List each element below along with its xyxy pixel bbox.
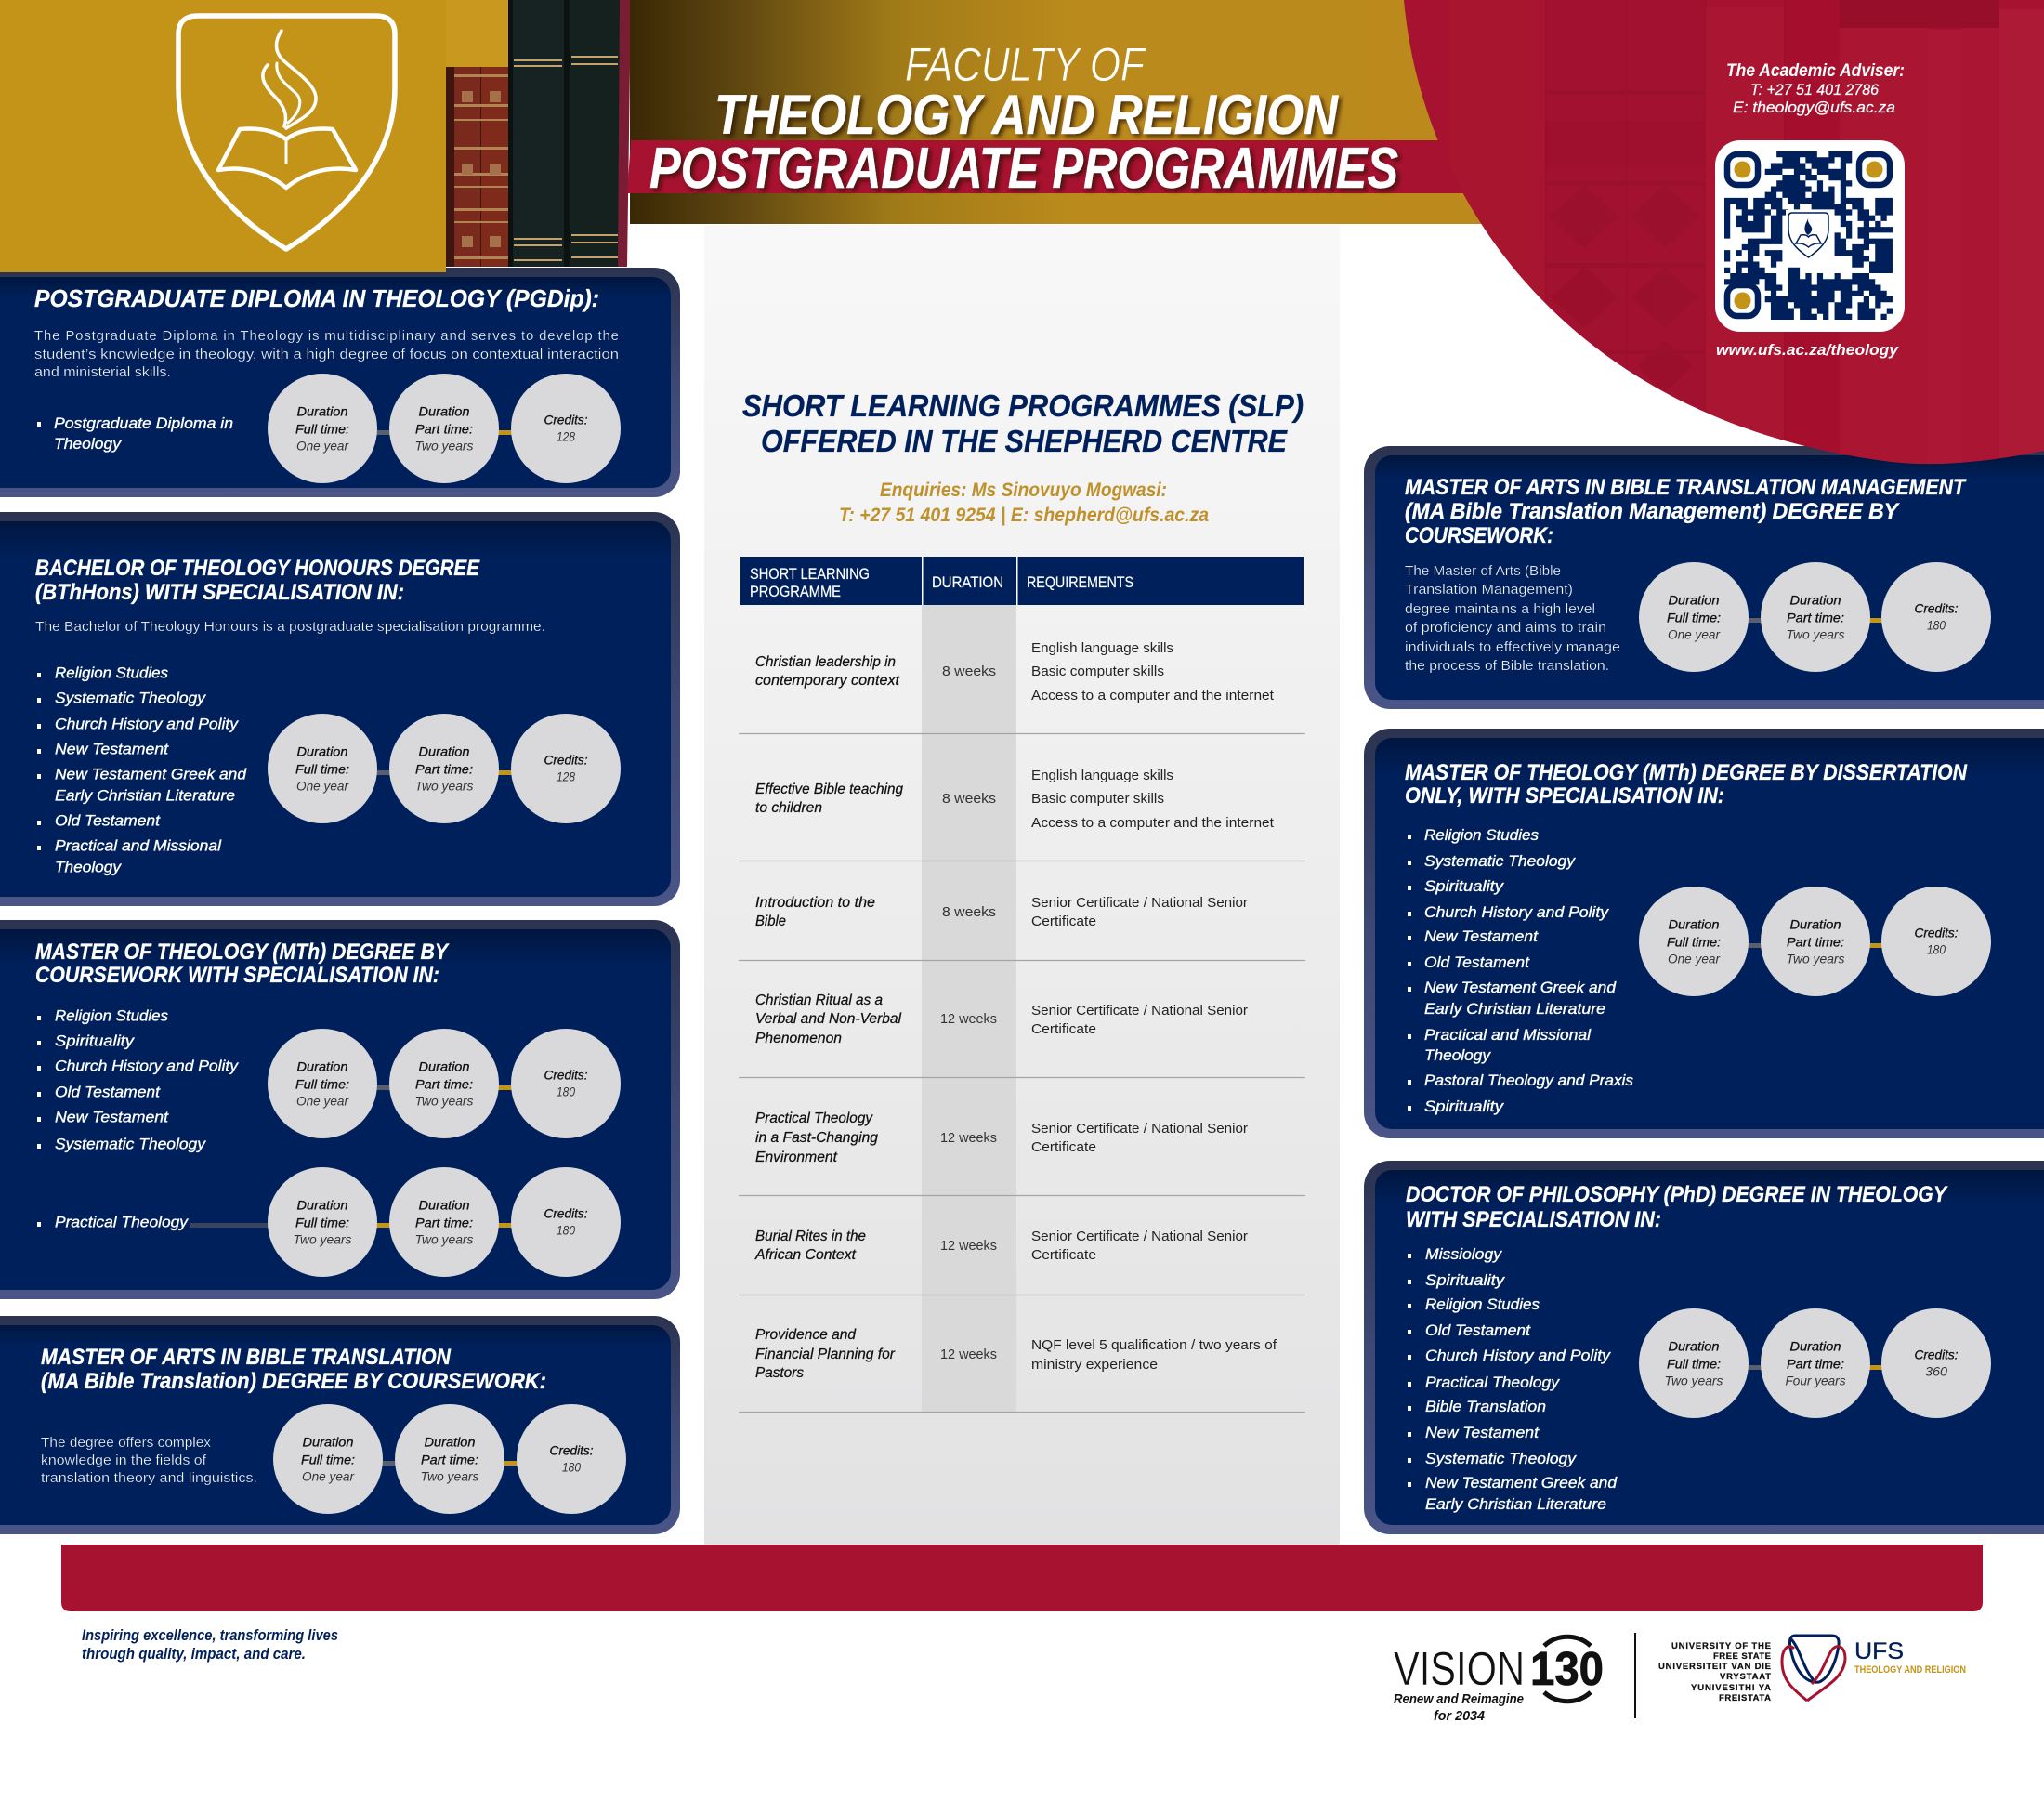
- panel: doctor of philosophy: 360: [1925, 1364, 1947, 1379]
- panel: master of arts in bible translation management: of proficiency and aims to train: [1405, 620, 1606, 636]
- table: Certificate: [1031, 914, 1096, 929]
- panel: master of arts in bible translation: One year: [302, 1468, 355, 1483]
- table: 8 weeks: [942, 791, 996, 807]
- panel: bachelor of theology honours: Duration: [418, 743, 470, 758]
- table: Senior Certificate / National Senior: [1031, 895, 1248, 911]
- panel: postgraduate diploma: The Postgraduate Diploma in Theology is multidisciplinary and serves to develop the: [34, 328, 619, 344]
- tagline: through quality, impact, and care.: [82, 1645, 306, 1663]
- table: Effective Bible teaching: [755, 782, 903, 797]
- panel: bachelor of theology honours: Part time:: [415, 762, 473, 777]
- table: English language skills: [1031, 640, 1173, 656]
- logo: UFS wordmark: UFS: [1854, 1638, 1904, 1664]
- university name: YUNIVESITHI YA: [1691, 1683, 1771, 1693]
- panel: master of theology by coursework: Church History and Polity: [55, 1058, 240, 1074]
- panel: master of theology by coursework: Part time:: [415, 1216, 473, 1230]
- panel: master of theology by coursework: [0, 920, 680, 1299]
- panel: bachelor of theology honours: 128: [557, 769, 575, 784]
- panel: doctor of philosophy: Full time:: [1667, 1357, 1721, 1372]
- table: Introduction to the: [755, 895, 875, 911]
- panel: postgraduate diploma: Two years: [414, 439, 474, 454]
- tagline: [82, 1626, 338, 1663]
- panel: doctor of philosophy: Duration: [1789, 1338, 1841, 1353]
- table: Certificate: [1031, 1139, 1096, 1155]
- table: Christian leadership in: [755, 654, 896, 670]
- table: Senior Certificate / National Senior: [1031, 1121, 1248, 1137]
- panel: master of arts in bible translation: 180: [562, 1459, 581, 1474]
- panel: postgraduate diploma: Duration: [418, 403, 470, 418]
- university name: VRYSTAAT: [1720, 1672, 1771, 1682]
- university name: UNIVERSITY OF THE: [1671, 1641, 1771, 1651]
- table: Practical Theology: [755, 1111, 873, 1126]
- panel: master of theology by dissertation: One year: [1668, 952, 1721, 966]
- panel: doctor of philosophy: Church History and Polity: [1425, 1347, 1612, 1364]
- panel: master of arts in bible translation management: The Master of Arts (Bible: [1405, 563, 1561, 579]
- panel: postgraduate diploma: student’s knowledge in theology, with a high degree of focus on contextual interaction: [34, 347, 619, 362]
- panel: doctor of philosophy: DOCTOR OF PHILOSOPHY (PhD) DEGREE IN THEOLOGY: [1406, 1182, 1948, 1207]
- panel: doctor of philosophy: Part time:: [1787, 1357, 1844, 1372]
- panel: master of arts in bible translation management: COURSEWORK:: [1405, 523, 1553, 548]
- panel: master of theology by dissertation: Part time:: [1787, 935, 1844, 950]
- panel: doctor of philosophy: Systematic Theology: [1425, 1450, 1578, 1467]
- panel: master of theology by dissertation: Early Christian Literature: [1424, 1000, 1605, 1018]
- panel: bachelor of theology honours: Two years: [414, 779, 474, 794]
- header: book spines photo: [446, 0, 631, 267]
- table: 12 weeks: [940, 1130, 997, 1146]
- panel: master of theology by coursework: COURSEWORK WITH SPECIALISATION IN:: [35, 963, 439, 988]
- panel: postgraduate diploma: Full time:: [295, 422, 349, 437]
- icon: QR code: [1715, 140, 1905, 332]
- panel: master of theology by dissertation: Credits:: [1914, 926, 1959, 940]
- panel: master of arts in bible translation management: degree maintains a high level: [1405, 601, 1595, 617]
- panel: master of arts in bible translation: (MA Bible Translation) DEGREE BY COURSEWORK:: [41, 1369, 546, 1394]
- panel: master of arts in bible translation management: Duration: [1669, 593, 1720, 608]
- panel: master of theology by dissertation: Full time:: [1667, 935, 1721, 950]
- table: in a Fast-Changing: [755, 1130, 878, 1146]
- panel: master of theology by coursework: Systematic Theology: [55, 1136, 207, 1152]
- panel: master of arts in bible translation management: Two years: [1786, 626, 1845, 641]
- panel: master of theology by dissertation: Theology: [1424, 1046, 1492, 1064]
- panel: master of theology by dissertation: Religion Studies: [1424, 826, 1539, 844]
- table: Access to a computer and the internet: [1031, 688, 1275, 703]
- panel: master of theology by coursework: 180: [557, 1223, 575, 1238]
- panel: master of arts in bible translation: knowledge in the fields of: [41, 1453, 207, 1468]
- panel: doctor of philosophy: Early Christian Literature: [1425, 1495, 1606, 1513]
- panel: master of theology by coursework: Part time:: [415, 1076, 473, 1091]
- panel: master of theology by coursework: Spirituality: [55, 1032, 136, 1050]
- panel: master of theology by coursework: Credits:: [544, 1067, 588, 1082]
- panel: doctor of philosophy: New Testament: [1425, 1424, 1540, 1441]
- contact: academic adviser: [1726, 61, 1905, 116]
- title: THEOLOGY AND RELIGION: [714, 84, 1339, 146]
- panel: master of arts in bible translation: Two years: [420, 1468, 479, 1483]
- table: Bible: [755, 914, 786, 929]
- footer: crimson bar: [61, 1545, 1983, 1611]
- table: Certificate: [1031, 1021, 1096, 1037]
- panel: short learning programmes: Enquiries: Ms Sinovuyo Mogwasi:: [880, 480, 1167, 501]
- table: Pastors: [755, 1365, 804, 1381]
- table: Certificate: [1031, 1247, 1096, 1263]
- panel: bachelor of theology honours: Credits:: [544, 753, 588, 768]
- table: Phenomenon: [755, 1031, 842, 1046]
- panel: bachelor of theology honours: BACHELOR OF THEOLOGY HONOURS DEGREE: [35, 556, 480, 581]
- panel: bachelor of theology honours: (BThHons) WITH SPECIALISATION IN:: [35, 580, 404, 605]
- tagline: Inspiring excellence, transforming lives: [82, 1626, 338, 1644]
- panel: bachelor of theology honours: New Testament Greek and: [55, 766, 247, 782]
- university name: UNIVERSITEIT VAN DIE: [1658, 1662, 1771, 1672]
- logo: Vision 130: VISION: [1394, 1642, 1525, 1695]
- panel: master of theology by coursework: 180: [557, 1084, 575, 1098]
- table: Access to a computer and the internet: [1031, 815, 1275, 831]
- panel: master of theology by dissertation: Practical and Missional: [1424, 1026, 1592, 1044]
- panel: master of theology by coursework: Duration: [297, 1197, 348, 1212]
- logo: Vision 130: 130: [1530, 1642, 1604, 1695]
- panel: master of theology by coursework: Two years: [294, 1232, 351, 1247]
- panel: master of theology by coursework: Full time:: [295, 1076, 349, 1091]
- table: 8 weeks: [942, 904, 996, 920]
- panel: bachelor of theology honours: Church History and Polity: [55, 716, 240, 732]
- panel: master of arts in bible translation management: the process of Bible translation.: [1405, 658, 1609, 674]
- panel: master of arts in bible translation management: Full time:: [1667, 610, 1721, 624]
- table: Providence and: [755, 1327, 857, 1343]
- title: FACULTY OF: [905, 38, 1146, 91]
- panel: doctor of philosophy: Duration: [1669, 1338, 1720, 1353]
- panel: master of theology by coursework: Credits:: [544, 1206, 588, 1221]
- table: 12 weeks: [940, 1238, 997, 1254]
- table: SHORT LEARNING: [750, 566, 870, 583]
- panel: master of arts in bible translation: Credits:: [550, 1442, 594, 1457]
- panel: master of arts in bible translation management: Translation Management): [1405, 582, 1573, 598]
- panel: master of arts in bible translation management: One year: [1668, 626, 1721, 641]
- table: Basic computer skills: [1031, 791, 1164, 807]
- table: Senior Certificate / National Senior: [1031, 1003, 1248, 1019]
- table: Financial Planning for: [755, 1347, 896, 1362]
- panel: bachelor of theology honours: Systematic Theology: [55, 690, 207, 706]
- table: Basic computer skills: [1031, 664, 1164, 679]
- panel: doctor of philosophy: Credits:: [1914, 1347, 1959, 1362]
- panel: master of arts in bible translation: translation theory and linguistics.: [41, 1470, 257, 1486]
- panel: bachelor of theology honours: New Testament: [55, 740, 169, 758]
- panel: master of arts in bible translation management: Part time:: [1787, 610, 1844, 624]
- table: DURATION: [932, 574, 1003, 591]
- panel: short learning programmes: T: +27 51 401 9254 | E: shepherd@ufs.ac.za: [839, 505, 1209, 526]
- panel: postgraduate diploma: POSTGRADUATE DIPLOMA IN THEOLOGY (PGDip):: [34, 284, 599, 312]
- panel: short learning programmes: [704, 225, 1340, 1545]
- panel: short learning programmes: SHORT LEARNING PROGRAMMES (SLP): [742, 388, 1304, 423]
- logo: Vision 130: [1394, 1637, 1604, 1724]
- panel: master of theology by coursework: Full time:: [295, 1216, 349, 1230]
- divider: [1634, 1633, 1636, 1718]
- website link: www.ufs.ac.za/theology: [1716, 341, 1900, 359]
- table: 12 weeks: [940, 1347, 997, 1362]
- panel: master of theology by dissertation: Systematic Theology: [1424, 852, 1577, 870]
- panel: master of theology by coursework: New Testament: [55, 1108, 169, 1126]
- panel: postgraduate diploma: Theology: [54, 435, 123, 453]
- logo: UFS wordmark: THEOLOGY AND RELIGION: [1854, 1664, 1966, 1676]
- panel: bachelor of theology honours: Full time:: [295, 762, 349, 777]
- panel: master of arts in bible translation management: MASTER OF ARTS IN BIBLE TRANSLATION MANAGEMENT: [1405, 475, 1967, 500]
- panel: master of theology by dissertation: Old Testament: [1424, 953, 1530, 971]
- panel: master of theology by dissertation: 180: [1927, 942, 1946, 957]
- table: Verbal and Non-Verbal: [755, 1011, 902, 1027]
- panel: doctor of philosophy: Four years: [1786, 1374, 1845, 1388]
- panel: bachelor of theology honours: The Bachelor of Theology Honours is a postgraduate specialisation programme.: [35, 619, 545, 635]
- panel: master of arts in bible translation management: (MA Bible Translation Management) DEGREE BY: [1405, 499, 1900, 524]
- panel: master of theology by coursework: MASTER OF THEOLOGY (MTh) DEGREE BY: [35, 940, 450, 965]
- table: REQUIREMENTS: [1027, 574, 1133, 591]
- panel: bachelor of theology honours: One year: [296, 779, 349, 794]
- contact: academic adviser: E: theology@ufs.ac.za: [1733, 99, 1895, 116]
- panel: doctor of philosophy: New Testament Greek and: [1425, 1474, 1618, 1492]
- panel: doctor of philosophy: Two years: [1665, 1374, 1723, 1388]
- table: Senior Certificate / National Senior: [1031, 1229, 1248, 1244]
- table: 12 weeks: [940, 1011, 997, 1027]
- panel: master of theology by coursework: Duration: [418, 1197, 470, 1212]
- table: contemporary context: [755, 673, 900, 689]
- header: crimson bookshelf curve: [1394, 0, 2044, 474]
- panel: master of theology by dissertation: New Testament Greek and: [1424, 979, 1617, 996]
- panel: master of theology by dissertation: Two years: [1786, 952, 1845, 966]
- panel: master of arts in bible translation: [0, 1316, 680, 1534]
- panel: doctor of philosophy: Religion Studies: [1425, 1295, 1540, 1313]
- panel: postgraduate diploma: and ministerial skills.: [34, 364, 171, 380]
- panel: master of arts in bible translation management: Credits:: [1914, 600, 1959, 615]
- panel: master of arts in bible translation: Duration: [303, 1435, 354, 1450]
- panel: postgraduate diploma: Credits:: [544, 413, 588, 427]
- panel: doctor of philosophy: WITH SPECIALISATION IN:: [1406, 1207, 1661, 1232]
- university name: FREISTATA: [1719, 1693, 1771, 1703]
- table: ministry experience: [1031, 1357, 1158, 1373]
- table: PROGRAMME: [750, 584, 841, 600]
- title: [649, 38, 1398, 201]
- panel: master of arts in bible translation management: individuals to effectively manage: [1405, 639, 1620, 655]
- panel: postgraduate diploma: [0, 260, 680, 497]
- panel: doctor of philosophy: Bible Translation: [1425, 1398, 1546, 1415]
- panel: bachelor of theology honours: Duration: [297, 743, 348, 758]
- title: POSTGRADUATE PROGRAMMES: [649, 137, 1398, 201]
- panel: master of theology by dissertation: Pastoral Theology and Praxis: [1424, 1071, 1634, 1089]
- panel: master of arts in bible translation: Part time:: [421, 1452, 478, 1466]
- logo: UFS heart shield: [1782, 1636, 1845, 1701]
- panel: postgraduate diploma: One year: [296, 439, 349, 454]
- table: Christian Ritual as a: [755, 993, 883, 1008]
- logo: Vision 130: Renew and Reimagine: [1394, 1691, 1524, 1707]
- panel: master of arts in bible translation: Duration: [424, 1435, 476, 1450]
- panel: postgraduate diploma: 128: [557, 429, 575, 444]
- panel: master of theology by coursework: One year: [296, 1093, 349, 1108]
- panel: doctor of philosophy: Spirituality: [1425, 1271, 1506, 1289]
- table: 8 weeks: [942, 664, 996, 679]
- panel: master of theology by dissertation: Church History and Polity: [1424, 903, 1610, 921]
- contact: academic adviser: The Academic Adviser:: [1726, 61, 1905, 81]
- panel: master of arts in bible translation management: 180: [1927, 617, 1946, 632]
- panel: postgraduate diploma: Part time:: [415, 422, 473, 437]
- panel: postgraduate diploma: Duration: [297, 403, 348, 418]
- table: NQF level 5 qualification / two years of: [1031, 1337, 1278, 1353]
- panel: bachelor of theology honours: Practical and Missional: [55, 836, 222, 855]
- panel: master of theology by coursework: Duration: [418, 1059, 470, 1074]
- panel: doctor of philosophy: [1364, 1161, 2044, 1534]
- panel: short learning programmes: OFFERED IN THE SHEPHERD CENTRE: [761, 424, 1288, 458]
- icon: shield logo with flame and book: [178, 16, 395, 249]
- panel: doctor of philosophy: Practical Theology: [1425, 1374, 1561, 1391]
- panel: master of theology by coursework: Two years: [414, 1093, 474, 1108]
- panel: bachelor of theology honours: Old Testament: [55, 812, 161, 829]
- panel: postgraduate diploma: Postgraduate Diploma in: [54, 414, 233, 432]
- university name: FREE STATE: [1713, 1651, 1771, 1662]
- panel: master of theology by coursework: Two years: [414, 1232, 474, 1247]
- panel: master of theology by dissertation: Duration: [1669, 916, 1720, 931]
- panel: master of theology by dissertation: Spirituality: [1424, 877, 1505, 895]
- panel: master of arts in bible translation: The degree offers complex: [41, 1435, 212, 1451]
- university name: [1658, 1641, 1771, 1703]
- panel: master of theology by dissertation: [1364, 729, 2044, 1138]
- logo: Vision 130: for 2034: [1434, 1708, 1486, 1724]
- panel: master of theology by coursework: Old Testament: [55, 1084, 161, 1100]
- panel: bachelor of theology honours: Religion Studies: [55, 664, 168, 682]
- header: gold gradient band: [630, 0, 1505, 224]
- panel: doctor of philosophy: Missiology: [1425, 1245, 1503, 1263]
- header: gold logo block: [0, 0, 446, 272]
- panel: master of theology by coursework: Duration: [297, 1059, 348, 1074]
- panel: master of arts in bible translation: Full time:: [301, 1452, 355, 1466]
- panel: master of arts in bible translation management: Duration: [1789, 593, 1841, 608]
- panel: master of theology by coursework: Religion Studies: [55, 1007, 168, 1024]
- panel: master of theology by dissertation: MASTER OF THEOLOGY (MTh) DEGREE BY DISSERTATION: [1405, 760, 1968, 785]
- table: [739, 557, 1305, 1413]
- panel: master of theology by dissertation: New Testament: [1424, 927, 1539, 945]
- panel: master of theology by coursework: Practical Theology: [55, 1214, 190, 1230]
- table: Burial Rites in the: [755, 1229, 866, 1244]
- logo: UFS wordmark: [1854, 1638, 1966, 1676]
- contact: academic adviser: T: +27 51 401 2786: [1750, 81, 1880, 99]
- table: English language skills: [1031, 768, 1173, 783]
- table: to children: [755, 800, 822, 816]
- panel: bachelor of theology honours: [0, 512, 680, 906]
- panel: doctor of philosophy: Old Testament: [1425, 1321, 1531, 1339]
- table: African Context: [754, 1247, 857, 1263]
- panel: master of theology by dissertation: Duration: [1789, 916, 1841, 931]
- panel: master of arts in bible translation: MASTER OF ARTS IN BIBLE TRANSLATION: [41, 1345, 452, 1370]
- panel: bachelor of theology honours: Early Christian Literature: [55, 786, 235, 805]
- panel: master of arts in bible translation management: [1364, 446, 2044, 709]
- panel: master of theology by dissertation: Spirituality: [1424, 1098, 1505, 1115]
- header: crimson title bar: [627, 140, 1505, 193]
- panel: bachelor of theology honours: Theology: [55, 859, 123, 875]
- table: Environment: [755, 1150, 838, 1165]
- panel: master of theology by dissertation: ONLY, WITH SPECIALISATION IN:: [1405, 783, 1724, 808]
